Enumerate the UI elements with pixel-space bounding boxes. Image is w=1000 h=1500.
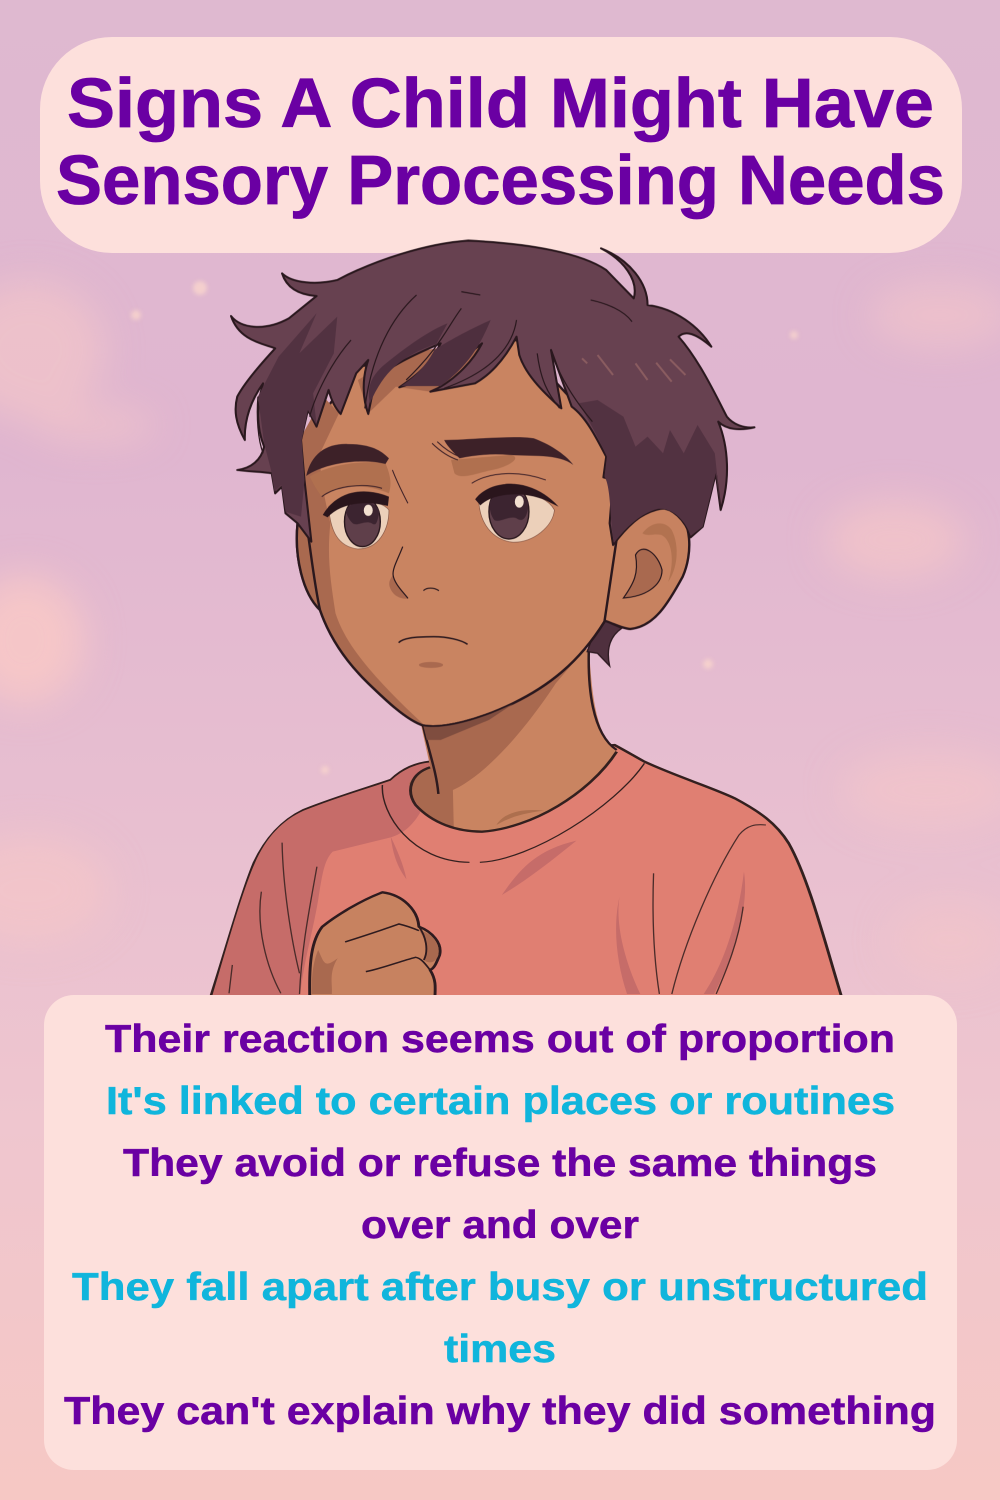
left eyebrow bbox=[306, 444, 389, 476]
neck outlines bbox=[422, 648, 617, 794]
neck bbox=[409, 648, 617, 832]
title line 2: Sensory Processing Needs bbox=[56, 141, 945, 219]
hair dark left bbox=[258, 313, 337, 517]
hair dark fringe bbox=[369, 320, 491, 403]
lower lip bbox=[419, 662, 443, 668]
boy head bbox=[231, 241, 754, 740]
title line 1: Signs A Child Might Have bbox=[67, 64, 934, 142]
background light specks bbox=[131, 281, 798, 774]
shirt creases bbox=[391, 837, 745, 994]
nose bbox=[389, 575, 409, 599]
jaw line bbox=[297, 523, 604, 726]
sign 3 line 1: They avoid or refuse the same things bbox=[123, 1142, 877, 1185]
left upper lid bbox=[323, 491, 389, 517]
neck back hair bbox=[587, 618, 622, 666]
mouth bbox=[399, 637, 468, 644]
right eye highlight bbox=[515, 496, 524, 508]
face side shadow bbox=[297, 397, 423, 724]
illustration: boy bbox=[209, 241, 843, 1002]
fist bbox=[310, 892, 440, 1002]
sign 4 line 1: They fall apart after busy or unstructured bbox=[72, 1266, 928, 1309]
left eye white bbox=[329, 500, 389, 549]
brow wrinkle lines bbox=[322, 442, 546, 503]
sign 4 line 2: times bbox=[444, 1328, 556, 1371]
title background bbox=[40, 37, 962, 253]
brow shadows bbox=[310, 455, 515, 497]
hair strand lines bbox=[257, 292, 632, 453]
shirt fold lines bbox=[229, 825, 766, 994]
left iris bbox=[344, 497, 380, 547]
ear inner bbox=[623, 549, 662, 598]
collarbone mark bbox=[496, 810, 544, 825]
right eye bbox=[475, 484, 559, 542]
hair dark right bbox=[579, 400, 721, 543]
boy torso and shirt bbox=[209, 648, 843, 1002]
collar bbox=[411, 752, 617, 832]
title panel bbox=[40, 37, 962, 253]
left iris dark top bbox=[346, 502, 380, 524]
sign 1: Their reaction seems out of proportion bbox=[105, 1018, 895, 1061]
jaw shadow on neck side bbox=[423, 704, 513, 740]
right iris bbox=[489, 484, 529, 539]
sign 3 line 2: over and over bbox=[361, 1204, 639, 1247]
ear bbox=[603, 508, 689, 629]
left eye bbox=[323, 491, 389, 549]
shirt shadow bbox=[211, 762, 430, 1001]
background clouds bbox=[0, 280, 1000, 980]
right iris dark top bbox=[490, 492, 529, 521]
right upper lid bbox=[475, 484, 559, 507]
fist shading and finger lines bbox=[312, 950, 338, 994]
signs background bbox=[44, 995, 957, 1470]
hair highlights bbox=[582, 355, 685, 382]
sign 2: It's linked to certain places or routines bbox=[106, 1080, 895, 1123]
face bbox=[297, 340, 617, 726]
ear shade bbox=[642, 523, 677, 582]
left eye highlight bbox=[364, 505, 373, 516]
nose outline bbox=[393, 547, 439, 598]
collar band bbox=[382, 763, 644, 862]
sign 5: They can't explain why they did something bbox=[64, 1390, 936, 1433]
signs panel bbox=[44, 995, 957, 1470]
hair bbox=[231, 241, 754, 545]
neck shadow bbox=[409, 653, 581, 827]
forehead shadow under fringe bbox=[358, 340, 506, 413]
right eyebrow bbox=[444, 437, 573, 465]
shirt bbox=[209, 745, 843, 1002]
right eye white bbox=[479, 490, 554, 542]
